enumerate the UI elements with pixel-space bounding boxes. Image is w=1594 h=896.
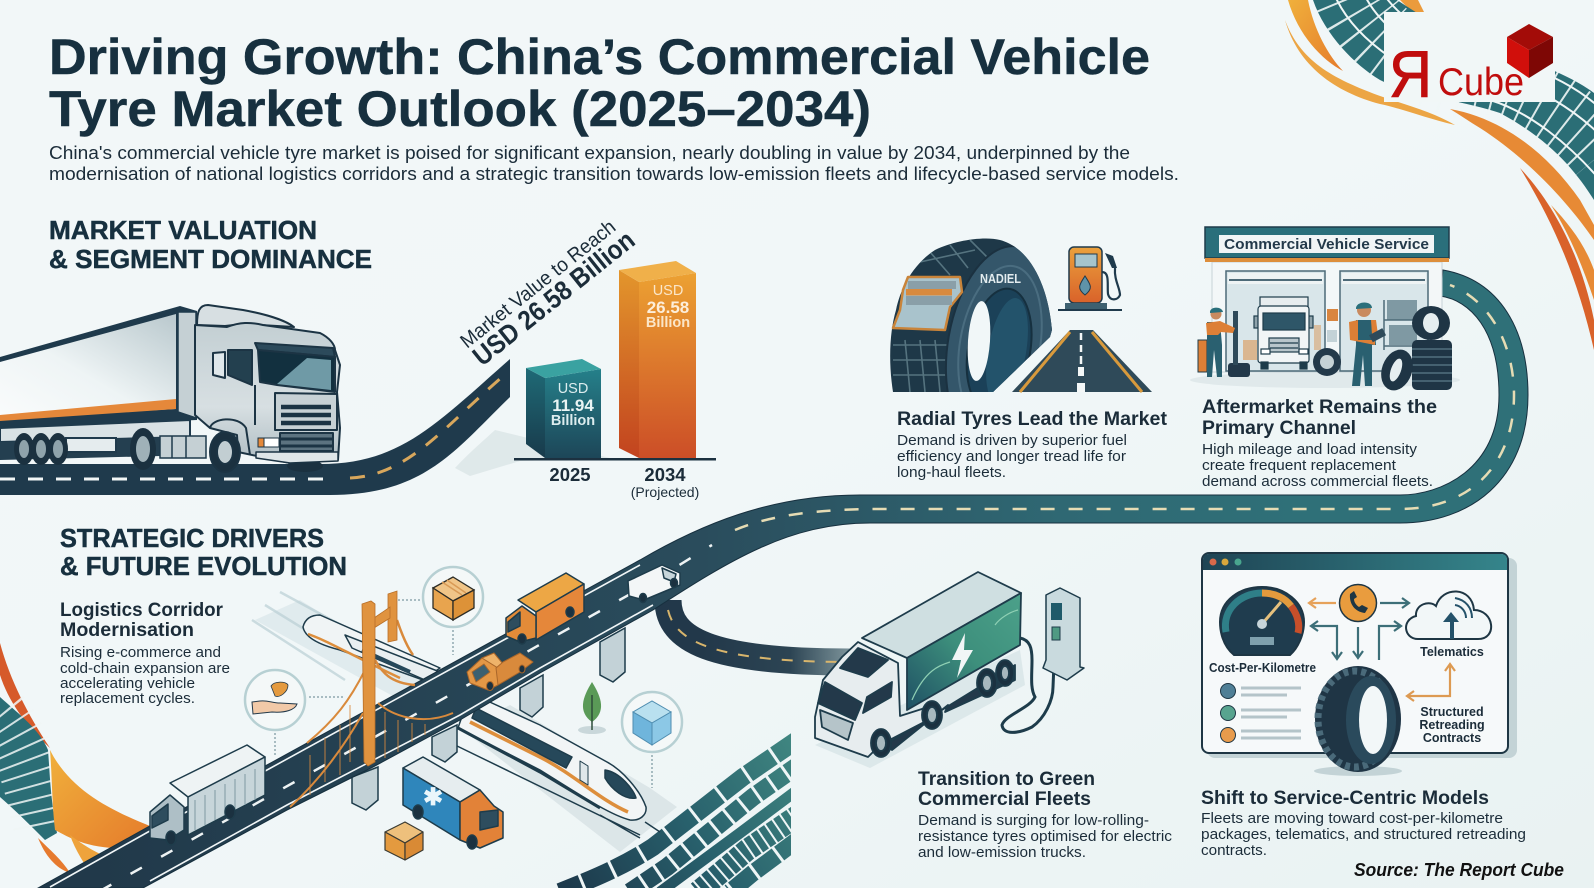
logo: RCube	[1384, 12, 1555, 111]
text: radial tyres: Radial Tyres Lead the Market	[897, 408, 1168, 430]
title: Tyre Market Outlook (2025–2034)	[49, 81, 871, 137]
cab	[815, 642, 928, 757]
logo: RCube: Cube	[1438, 61, 1524, 104]
icon: phone	[1340, 584, 1376, 622]
text: green fleets: resistance tyres optimised for electric	[918, 828, 1173, 845]
service list	[1220, 684, 1301, 742]
text: service-centric: Shift to Service-Centric Models	[1201, 787, 1489, 809]
text: logistics corridor: cold-chain expansion are	[60, 660, 230, 677]
shelves and equipment	[1198, 300, 1420, 377]
decoration: top-right tyre tread and orange swooshes	[1285, 0, 1594, 350]
axis labels: (Projected)	[631, 484, 699, 500]
logo cube	[1507, 24, 1553, 78]
text: aftermarket	[1202, 396, 1437, 490]
text: aftermarket: Aftermarket Remains the	[1202, 396, 1437, 418]
text: green fleets: Demand is surging for low-rolling-	[918, 812, 1149, 829]
text: radial tyres: Demand is driven by superior fuel	[897, 432, 1127, 449]
text: service-centric: Fleets are moving toward cost-per-kilometre	[1201, 810, 1503, 827]
window header	[1203, 554, 1507, 570]
label: structured retreading contracts: Structured	[1420, 705, 1484, 719]
icon: telematics cloud	[1406, 591, 1491, 639]
axis labels	[549, 464, 699, 500]
heading: market valuation: & SEGMENT DOMINANCE	[49, 244, 372, 274]
text: logistics corridor	[60, 599, 230, 707]
decoration: bottom tyre track marks	[560, 738, 800, 892]
bridge piers	[352, 628, 625, 810]
connector arrows	[1309, 598, 1455, 701]
text: aftermarket: create frequent replacement	[1202, 457, 1397, 474]
worker right	[1349, 302, 1386, 386]
text: green fleets: and low-emission trucks.	[918, 844, 1086, 861]
bar: 2034	[619, 261, 696, 458]
axis labels: 2034	[644, 464, 686, 485]
truck: orange pickup on highway	[467, 653, 533, 690]
text: service-centric: contracts.	[1201, 842, 1267, 859]
sign banner	[1205, 227, 1449, 262]
decoration: bottom-left tyre tread and orange swooshes	[0, 643, 150, 880]
building	[1190, 262, 1460, 388]
label: structured retreading contracts	[1419, 705, 1485, 745]
text: radial tyres: efficiency and longer tread life for	[897, 448, 1126, 465]
wheels	[871, 660, 1014, 757]
train: lower	[458, 693, 646, 820]
icon: tree	[578, 682, 606, 734]
sign banner: Commercial Vehicle Service	[1224, 237, 1429, 253]
bar: 2025: Billion	[551, 413, 595, 429]
tyre cross-section	[893, 277, 962, 330]
train: upper	[303, 615, 440, 680]
text: logistics corridor: accelerating vehicle	[60, 675, 195, 692]
icon: ev charger and cable	[1002, 588, 1084, 732]
text: aftermarket: Primary Channel	[1202, 417, 1356, 439]
icon: hand circle	[245, 670, 345, 755]
text: aftermarket: demand across commercial fleets.	[1202, 473, 1433, 490]
icon: cardboard box	[385, 822, 423, 860]
main winding road	[38, 270, 1528, 891]
intro text: China's commercial vehicle tyre market is poised for significant expansion, nearly doubling in value by 2034, underpinned by the	[49, 142, 1130, 163]
gauge	[1220, 587, 1304, 655]
logo: RCube: Я	[1389, 37, 1432, 111]
bridge tower and cables	[290, 591, 453, 807]
label: telematics: Telematics	[1420, 645, 1484, 659]
heading: strategic drivers	[60, 523, 347, 581]
icon: dashboard tyre	[1314, 666, 1402, 776]
road branch to green fleets	[668, 600, 850, 662]
text: logistics corridor: Logistics Corridor	[60, 599, 223, 621]
road: market growth ramp	[0, 359, 510, 495]
truck: white container on highway	[150, 745, 265, 845]
worker left	[1206, 308, 1235, 377]
panel: service dashboard	[1202, 553, 1517, 776]
text: service-centric	[1201, 787, 1526, 859]
label: cost-per-kilometre: Cost-Per-Kilometre	[1209, 661, 1316, 675]
title: Driving Growth: China’s Commercial Vehicle	[49, 29, 1150, 85]
heading: strategic drivers: & FUTURE EVOLUTION	[60, 551, 347, 581]
bar chart: market value	[514, 261, 716, 500]
garage doors	[1226, 271, 1428, 371]
icon: parcel circle	[398, 567, 483, 655]
heading: market valuation: MARKET VALUATION	[49, 215, 317, 245]
illustration: semi truck	[0, 305, 340, 472]
text: radial tyres	[897, 408, 1168, 481]
text: logistics corridor: Modernisation	[60, 619, 194, 641]
text: radial tyres: long-haul fleets.	[897, 464, 1006, 481]
bar: 2034: Billion	[646, 315, 690, 331]
icon: fuel pump	[1058, 247, 1122, 311]
icon: ice cube circle	[622, 692, 682, 788]
icon: highway	[1012, 330, 1152, 392]
truck: blue refrigerated	[403, 757, 503, 849]
ev truck shadow	[815, 650, 1025, 768]
text: logistics corridor: replacement cycles.	[60, 690, 195, 707]
illustration: commercial vehicle service centre	[1190, 227, 1460, 395]
truck: white van on highway	[628, 565, 680, 602]
heading: market valuation	[49, 215, 372, 274]
bar: 2034: USD	[653, 283, 683, 299]
text: aftermarket: High mileage and load intensity	[1202, 441, 1418, 458]
truck chassis and rear wheels	[0, 428, 206, 470]
intro text	[49, 142, 1179, 184]
illustration: radial tyre	[890, 238, 1052, 392]
truck: blue refrigerated: ✱	[423, 784, 443, 811]
truck in bay	[1254, 297, 1313, 369]
bar: 2034: 26.58	[647, 298, 689, 317]
title	[49, 29, 1150, 137]
source credit: Source: The Report Cube	[1354, 860, 1564, 880]
lightning bolt	[952, 633, 973, 678]
text: service-centric: packages, telematics, and structured retreading	[1201, 826, 1526, 843]
bottom margin	[0, 888, 1594, 896]
text: green fleets	[918, 768, 1173, 861]
tyre stack	[1376, 306, 1452, 395]
bar: 2025	[526, 359, 601, 458]
text: green fleets: Transition to Green	[918, 768, 1095, 790]
bar: 2025: USD	[558, 381, 588, 397]
bar: 2025: 11.94	[552, 396, 594, 415]
label: structured retreading contracts: Retreading	[1419, 718, 1485, 732]
text: logistics corridor: Rising e-commerce and	[60, 644, 221, 661]
callout: market value to reach: USD 26.58 Billion	[467, 225, 640, 372]
illustration: electric truck	[815, 572, 1025, 768]
bar shadow	[455, 430, 610, 476]
truck cab	[195, 305, 340, 472]
label: structured retreading contracts: Contracts	[1423, 731, 1481, 745]
chassis	[885, 665, 1015, 750]
truck: orange cargo on highway	[506, 573, 584, 644]
text: green fleets: Commercial Fleets	[918, 788, 1091, 810]
cargo box	[862, 572, 1021, 658]
tyre brand: NADIEL	[980, 271, 1021, 286]
callout: market value to reach: Market Value to Reach	[456, 216, 620, 353]
axis labels: 2025	[549, 464, 591, 485]
truck trailer	[0, 306, 197, 442]
rail track and motion shadows	[252, 592, 677, 852]
heading: strategic drivers: STRATEGIC DRIVERS	[60, 523, 324, 553]
intro text: modernisation of national logistics corridors and a strategic transition towards low-emission fleets and lifecycle-based service models.	[49, 163, 1179, 184]
